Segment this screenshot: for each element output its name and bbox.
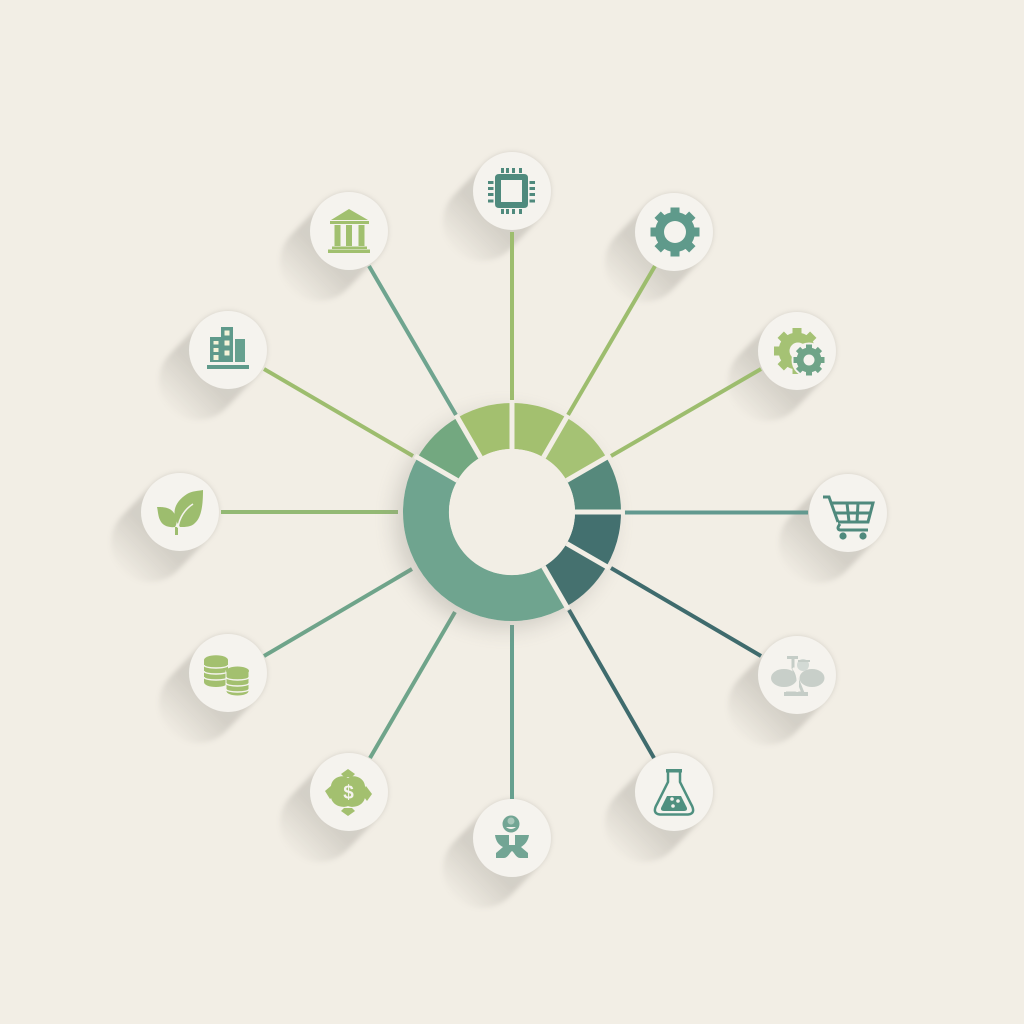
- segment: 120-150: [544, 544, 606, 606]
- segment: 330-360: [458, 403, 512, 457]
- node: buildings: [189, 311, 267, 389]
- donut hole: [449, 449, 575, 575]
- node: twin gears: [758, 312, 836, 390]
- icon: twin gears: [774, 328, 826, 378]
- segment: 60-90: [567, 458, 621, 512]
- node: cart: [809, 474, 887, 552]
- icon: microchip: [488, 168, 535, 214]
- connector spokes: [221, 232, 808, 799]
- node: coins: [189, 634, 267, 712]
- icon: gear: [650, 208, 700, 256]
- segment: 30-60: [544, 418, 606, 480]
- segment: large 150-300: [403, 458, 566, 621]
- node drop shadows: [150, 191, 848, 869]
- icon: shopping cart: [823, 497, 873, 540]
- node: leaf: [141, 473, 219, 551]
- node: dollar: [310, 753, 388, 831]
- icon: faded flask with blobs: [771, 658, 824, 696]
- node: gear: [635, 193, 713, 271]
- node: flask: [635, 753, 713, 831]
- icon: city buildings: [207, 327, 249, 369]
- segment dividers: [415, 400, 624, 609]
- icon: coin stacks: [204, 655, 249, 696]
- node: beaker blobs: [758, 636, 836, 714]
- node: microchip: [473, 152, 551, 230]
- central donut chart: [395, 400, 624, 629]
- icon: chemistry flask: [655, 769, 693, 814]
- icon: dollar with arrows: $: [343, 782, 354, 804]
- segment: 300-330: [418, 418, 480, 480]
- icon: person figure: [495, 816, 529, 858]
- icon: bank building: [328, 209, 370, 253]
- node: person: [473, 799, 551, 877]
- segment: 90-120: [567, 512, 621, 566]
- segment: 0-30: [512, 403, 566, 457]
- icon: leaf sprout: [157, 490, 203, 535]
- node: bank: [310, 192, 388, 270]
